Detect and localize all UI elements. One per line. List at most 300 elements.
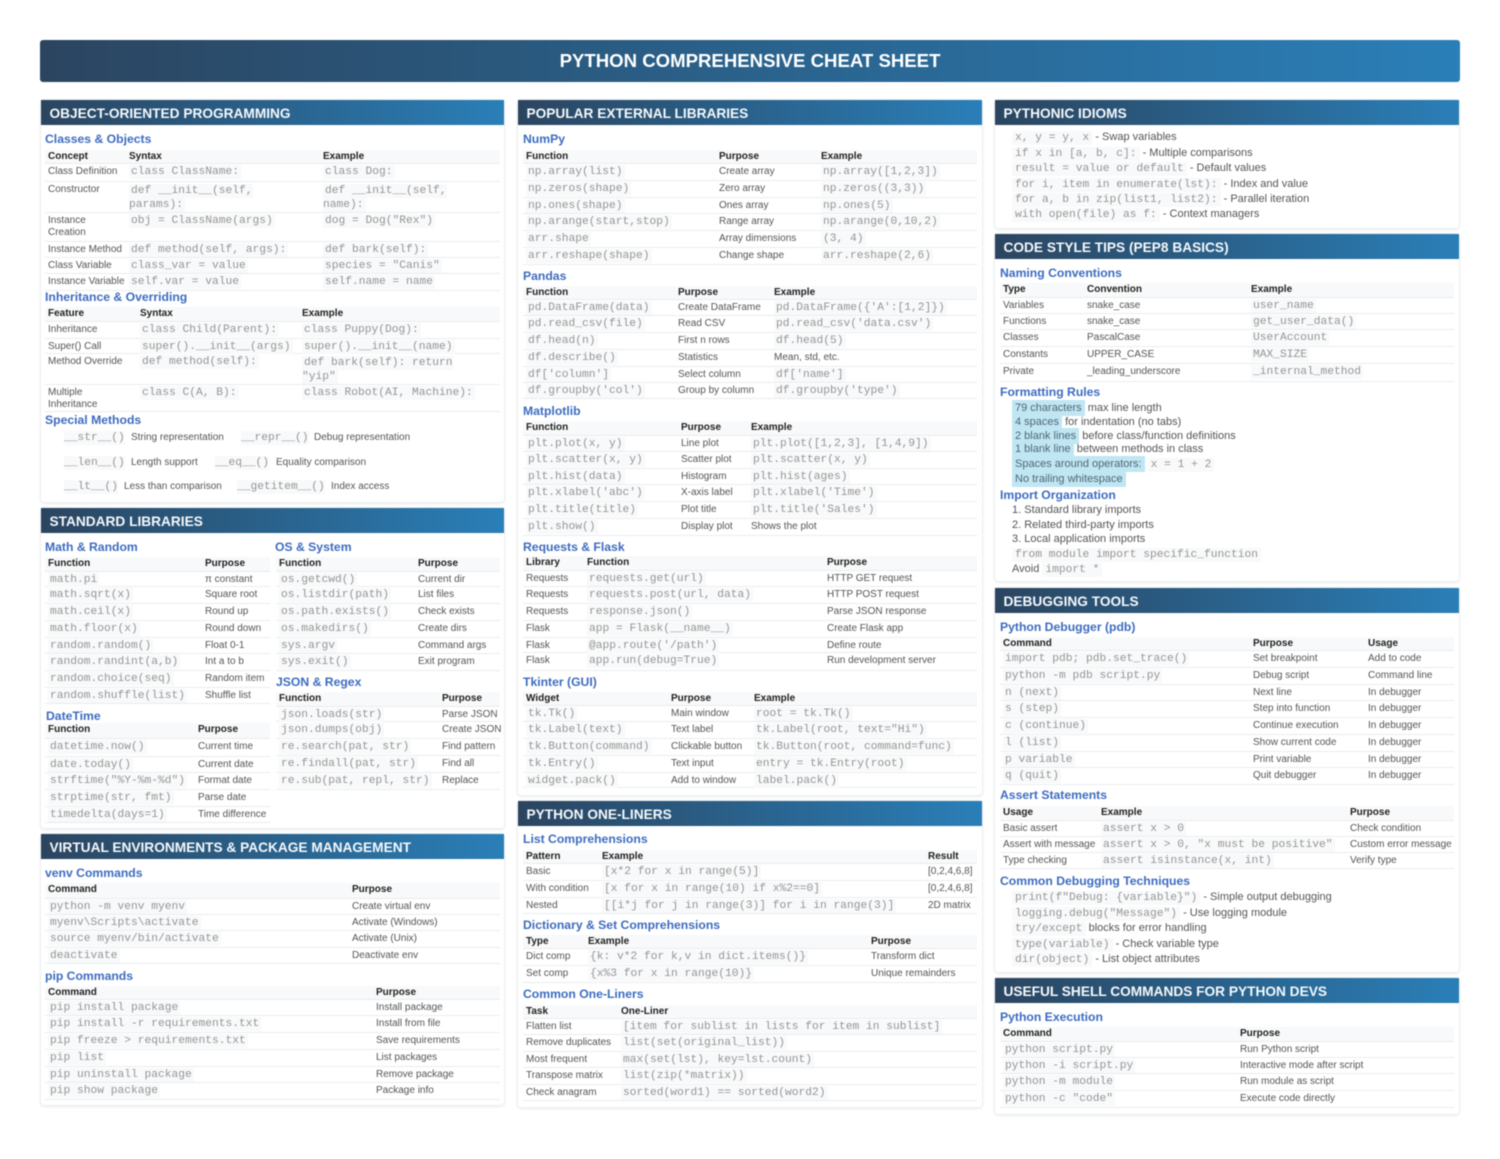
table: python execution: python -c "code" bbox=[1005, 1093, 1113, 1105]
subheading: math and random: Math & Random bbox=[45, 540, 138, 554]
heading: pythonic idioms: PYTHONIC IDIOMS bbox=[1004, 106, 1127, 121]
table: naming conventions: Convention bbox=[1087, 284, 1142, 295]
subheading: special methods: Special Methods bbox=[45, 413, 141, 427]
table: requests and flask: app = Flask(__name__) bbox=[589, 623, 731, 635]
subheading: venv commands: venv Commands bbox=[45, 866, 143, 880]
table: classes and objects: Syntax bbox=[129, 151, 162, 162]
table: pip commands bbox=[45, 986, 500, 1100]
table: classes and objects: def method(self, args): bbox=[131, 244, 286, 256]
table: inheritance and overriding: Syntax bbox=[140, 308, 173, 319]
subheading: import organization: Import Organization bbox=[1000, 488, 1116, 502]
subheading: numpy: NumPy bbox=[523, 132, 565, 146]
table: requests and flask: Library bbox=[526, 557, 560, 568]
table: inheritance and overriding: class Puppy(Dog): bbox=[304, 324, 419, 336]
table: datetime bbox=[45, 724, 270, 823]
table: json and regex: Create JSON bbox=[442, 724, 501, 735]
table: classes and objects: class Dog: bbox=[325, 166, 393, 178]
table: python execution: Command bbox=[1003, 1028, 1052, 1039]
table: math and random: π constant bbox=[205, 574, 252, 585]
table: classes and objects: Concept bbox=[48, 151, 88, 162]
table: list comprehensions: Basic bbox=[526, 866, 550, 877]
table: matplotlib: plt.plot(x, y) bbox=[528, 438, 623, 450]
table: os and system: Command args bbox=[418, 640, 486, 651]
table: pip commands: pip install package bbox=[50, 1002, 178, 1014]
list: special methods: __len__() bbox=[64, 457, 125, 469]
table: pandas: df['name'] bbox=[776, 369, 844, 381]
table: os and system: os.makedirs() bbox=[281, 623, 369, 635]
table: datetime: timedelta(days=1) bbox=[50, 809, 165, 821]
table: json and regex: Find all bbox=[442, 758, 474, 769]
table: python execution bbox=[1000, 1028, 1454, 1108]
list: formatting rules: 79 characters max line length bbox=[1015, 402, 1162, 414]
table: python debugger: Command line bbox=[1368, 670, 1432, 681]
table: pip commands: pip uninstall package bbox=[50, 1069, 192, 1081]
table: requests and flask: Requests bbox=[526, 589, 568, 600]
table: math and random: math.floor(x) bbox=[50, 623, 138, 635]
table: dictionary and set comprehensions: {x%3 for x in range(10)} bbox=[590, 968, 752, 980]
table: classes and objects: class_var = value bbox=[131, 260, 246, 272]
table: tkinter: tk.Button(root, command=func) bbox=[756, 741, 952, 753]
table: datetime: strftime("%Y-%m-%d") bbox=[50, 775, 185, 787]
table: python debugger: q (quit) bbox=[1005, 770, 1059, 782]
table: python debugger: import pdb; pdb.set_trace() bbox=[1005, 653, 1187, 665]
table: dictionary and set comprehensions: Type bbox=[526, 936, 549, 947]
table: classes and objects: def bark(self): bbox=[325, 244, 426, 256]
table: os and system bbox=[276, 558, 500, 671]
table: pip commands: Save requirements bbox=[376, 1035, 460, 1046]
table: os and system: Purpose bbox=[418, 558, 458, 569]
table: json and regex: Parse JSON bbox=[442, 709, 498, 720]
table: python debugger: Show current code bbox=[1253, 737, 1336, 748]
list: special methods: __eq__() bbox=[215, 457, 269, 469]
table: datetime: strptime(str, fmt) bbox=[50, 792, 172, 804]
table: classes and objects: Constructor bbox=[48, 184, 100, 195]
table: python debugger: Set breakpoint bbox=[1253, 653, 1318, 664]
table: pandas: Read CSV bbox=[678, 318, 725, 329]
table: python debugger: Quit debugger bbox=[1253, 770, 1316, 781]
table: requests and flask: Define route bbox=[827, 640, 881, 651]
table: math and random: Purpose bbox=[205, 558, 245, 569]
table: numpy: np.ones(shape) bbox=[528, 200, 623, 212]
table: json and regex: Find pattern bbox=[442, 741, 495, 752]
table: inheritance and overriding: Example bbox=[302, 308, 343, 319]
table: naming conventions: Variables bbox=[1003, 300, 1044, 311]
table: python debugger: Continue execution bbox=[1253, 720, 1339, 731]
table: pandas: Mean, std, etc. bbox=[774, 352, 840, 363]
table: pip commands: pip show package bbox=[50, 1085, 158, 1097]
table: python debugger: In debugger bbox=[1368, 754, 1421, 765]
table: requests and flask: requests.get(url) bbox=[589, 573, 704, 585]
table: pandas: Select column bbox=[678, 369, 741, 380]
list: special methods: Equality comparison bbox=[276, 457, 366, 468]
table: classes and objects: def __init__(self, bbox=[131, 185, 253, 197]
table: math and random: random.shuffle(list) bbox=[50, 690, 185, 702]
table: json and regex: re.sub(pat, repl, str) bbox=[281, 775, 430, 787]
table: tkinter: tk.Label(root, text="Hi") bbox=[756, 724, 925, 736]
table: common one-liners: Task bbox=[526, 1006, 548, 1017]
table: classes and objects: Class Definition bbox=[48, 166, 117, 177]
table: matplotlib: Display plot bbox=[681, 521, 733, 532]
table: common one-liners: Remove duplicates bbox=[526, 1037, 611, 1048]
table: tkinter: root = tk.Tk() bbox=[756, 708, 851, 720]
list: special methods: __repr__() bbox=[241, 432, 309, 444]
subheading: python execution: Python Execution bbox=[1000, 1010, 1103, 1024]
table: python execution: python -m module bbox=[1005, 1076, 1113, 1088]
table: assert statements: Example bbox=[1101, 807, 1142, 818]
table: requests and flask: Run development server bbox=[827, 655, 936, 666]
table: math and random: Square root bbox=[205, 589, 257, 600]
table: numpy: np.zeros(shape) bbox=[528, 183, 629, 195]
subheading: python debugger: Python Debugger (pdb) bbox=[1000, 620, 1135, 634]
table: tkinter: Clickable button bbox=[671, 741, 742, 752]
table: requests and flask bbox=[523, 556, 977, 671]
table: pip commands: pip freeze > requirements.txt bbox=[50, 1035, 246, 1047]
table: python debugger: Debug script bbox=[1253, 670, 1309, 681]
table: list comprehensions: 2D matrix bbox=[928, 900, 971, 911]
table: matplotlib: Example bbox=[751, 422, 792, 433]
table: inheritance and overriding: super().__init__(args) bbox=[142, 341, 291, 353]
list: pythonic idioms: with open(file) as f: - Context managers bbox=[1015, 208, 1259, 221]
table: classes and objects: Example bbox=[323, 151, 364, 162]
table: list comprehensions: Example bbox=[602, 851, 643, 862]
table: classes and objects: def __init__(self, bbox=[325, 185, 447, 197]
title bbox=[40, 40, 1460, 82]
table: inheritance and overriding: Multiple bbox=[48, 387, 82, 398]
table: matplotlib: plt.xlabel('abc') bbox=[528, 487, 643, 499]
table: matplotlib: Line plot bbox=[681, 438, 719, 449]
heading: virtual environments: VIRTUAL ENVIRONMENTS & PACKAGE MANAGEMENT bbox=[50, 840, 411, 855]
table: inheritance and overriding bbox=[45, 308, 500, 412]
table: naming conventions: Private bbox=[1003, 366, 1034, 377]
table: matplotlib: Shows the plot bbox=[751, 521, 817, 532]
table: requests and flask: HTTP POST request bbox=[827, 589, 919, 600]
table: datetime: Function bbox=[48, 724, 90, 735]
table: matplotlib: Function bbox=[526, 422, 568, 433]
list: special methods: __lt__() bbox=[64, 481, 118, 493]
list: special methods: Length support bbox=[131, 457, 198, 468]
table: math and random: random.random() bbox=[50, 640, 151, 652]
table: classes and objects: dog = Dog("Rex") bbox=[325, 215, 433, 227]
table: list comprehensions: [0,2,4,6,8] bbox=[928, 883, 972, 894]
table: classes and objects: class ClassName: bbox=[131, 166, 239, 178]
table: python debugger: In debugger bbox=[1368, 770, 1421, 781]
table: os and system: sys.exit() bbox=[281, 656, 349, 668]
subheading: naming conventions: Naming Conventions bbox=[1000, 266, 1122, 280]
table: os and system: sys.argv bbox=[281, 640, 335, 652]
table: pandas: df.groupby('type') bbox=[776, 385, 898, 397]
table: matplotlib: plt.show() bbox=[528, 521, 596, 533]
subheading: list comprehensions: List Comprehensions bbox=[523, 832, 648, 846]
table: naming conventions: Constants bbox=[1003, 349, 1048, 360]
table: numpy: Array dimensions bbox=[719, 233, 796, 244]
subheading: inheritance and overriding: Inheritance & Overriding bbox=[45, 290, 187, 304]
table: venv commands: myenv\Scripts\activate bbox=[50, 917, 199, 929]
table: list comprehensions: Nested bbox=[526, 900, 558, 911]
table: pandas: pd.DataFrame({'A':[1,2]}) bbox=[776, 302, 945, 314]
table: dictionary and set comprehensions: Example bbox=[588, 936, 629, 947]
table: os and system: os.getcwd() bbox=[281, 574, 355, 586]
table: matplotlib: plt.scatter(x, y) bbox=[528, 454, 643, 466]
table: pip commands: Install from file bbox=[376, 1018, 440, 1029]
table: math and random bbox=[45, 558, 270, 704]
table: matplotlib: plt.plot([1,2,3], [1,4,9]) bbox=[753, 438, 929, 450]
table: inheritance and overriding: "yip" bbox=[302, 371, 336, 383]
table: tkinter: Text label bbox=[671, 724, 713, 735]
table: naming conventions: PascalCase bbox=[1087, 332, 1140, 343]
panel: pythonic idioms bbox=[995, 100, 1459, 228]
table: naming conventions: Functions bbox=[1003, 316, 1046, 327]
table: python execution: python script.py bbox=[1005, 1044, 1113, 1056]
list: common debugging techniques: logging.debug("Message") - Use logging module bbox=[1015, 907, 1287, 920]
table: tkinter: Text input bbox=[671, 758, 714, 769]
heading: object-oriented programming bbox=[41, 100, 504, 125]
table: matplotlib: Histogram bbox=[681, 471, 727, 482]
table: inheritance and overriding: Inheritance bbox=[48, 399, 97, 410]
table: venv commands: Create virtual env bbox=[352, 901, 430, 912]
table: math and random: Random item bbox=[205, 673, 264, 684]
table: requests and flask: HTTP GET request bbox=[827, 573, 912, 584]
table: assert statements bbox=[1000, 806, 1454, 869]
table: common one-liners: [item for sublist in lists for item in sublist] bbox=[623, 1021, 940, 1033]
table: datetime: Purpose bbox=[198, 724, 238, 735]
table: venv commands: Activate (Unix) bbox=[352, 933, 417, 944]
table: numpy bbox=[523, 150, 977, 265]
table: assert statements: Check condition bbox=[1350, 823, 1421, 834]
table: json and regex: re.findall(pat, str) bbox=[281, 758, 416, 770]
table: pip commands: pip list bbox=[50, 1052, 104, 1064]
panel: python one-liners bbox=[518, 801, 982, 1107]
table: naming conventions: _internal_method bbox=[1253, 366, 1361, 378]
table: python debugger: Print variable bbox=[1253, 754, 1311, 765]
table: numpy: Zero array bbox=[719, 183, 765, 194]
subheading: os and system: OS & System bbox=[275, 540, 352, 554]
table: python debugger bbox=[1000, 638, 1454, 785]
subheading: requests and flask: Requests & Flask bbox=[523, 540, 625, 554]
table: list comprehensions: [[i*j for j in range(3)] for i in range(3)] bbox=[604, 900, 894, 912]
table: pandas: df.groupby('col') bbox=[528, 385, 643, 397]
table: venv commands: Purpose bbox=[352, 884, 392, 895]
table: common one-liners: sorted(word1) == sorted(word2) bbox=[623, 1087, 826, 1099]
table: common one-liners bbox=[523, 1006, 977, 1101]
table: numpy: Create array bbox=[719, 166, 775, 177]
table: tkinter: Add to window bbox=[671, 775, 736, 786]
table: pandas bbox=[523, 286, 977, 399]
table: math and random: Int a to b bbox=[205, 656, 244, 667]
table: numpy: Change shape bbox=[719, 250, 784, 261]
table: math and random: math.pi bbox=[50, 574, 97, 586]
table: requests and flask: Function bbox=[587, 557, 629, 568]
table: numpy: np.arange(0,10,2) bbox=[823, 216, 938, 228]
table: numpy: Ones array bbox=[719, 200, 768, 211]
list: common debugging techniques: type(variable) - Check variable type bbox=[1015, 938, 1219, 951]
list: pythonic idioms: x, y = y, x - Swap variables bbox=[1015, 131, 1177, 144]
heading: python one-liners bbox=[518, 801, 982, 826]
table: inheritance and overriding: Super() Call bbox=[48, 341, 101, 352]
heading: code style tips bbox=[995, 234, 1459, 259]
table: tkinter: tk.Tk() bbox=[528, 708, 575, 720]
list: special methods bbox=[64, 431, 410, 493]
subheading: common debugging techniques: Common Debugging Techniques bbox=[1000, 874, 1190, 888]
table: numpy: np.ones(5) bbox=[823, 200, 891, 212]
table: pip commands: Purpose bbox=[376, 987, 416, 998]
table: tkinter: Main window bbox=[671, 708, 729, 719]
table: python debugger: Step into function bbox=[1253, 703, 1330, 714]
table: venv commands: Command bbox=[48, 884, 97, 895]
title: PYTHON COMPREHENSIVE CHEAT SHEET bbox=[560, 50, 940, 71]
list: pythonic idioms: result = value or default - Default values bbox=[1015, 162, 1266, 175]
table: requests and flask: Parse JSON response bbox=[827, 606, 926, 617]
list: pythonic idioms bbox=[1014, 131, 1310, 221]
table: list comprehensions: [0,2,4,6,8] bbox=[928, 866, 972, 877]
subheading: assert statements: Assert Statements bbox=[1000, 788, 1107, 802]
table: python debugger: python -m pdb script.py bbox=[1005, 670, 1160, 682]
list: pythonic idioms: for a, b in zip(list1, list2): - Parallel iteration bbox=[1015, 193, 1309, 206]
table: tkinter: label.pack() bbox=[756, 775, 837, 787]
table: tkinter: Purpose bbox=[671, 693, 711, 704]
table: classes and objects: Class Variable bbox=[48, 260, 112, 271]
list: special methods: __str__() bbox=[64, 432, 125, 444]
table: python debugger: Command bbox=[1003, 638, 1052, 649]
table: requests and flask: response.json() bbox=[589, 606, 690, 618]
table: python execution: python -i script.py bbox=[1005, 1060, 1133, 1072]
table: common one-liners: max(set(lst), key=lst.count) bbox=[623, 1054, 812, 1066]
table: numpy: Example bbox=[821, 151, 862, 162]
list: special methods: Less than comparison bbox=[124, 481, 222, 492]
table: inheritance and overriding: super().__init__(name) bbox=[304, 341, 453, 353]
table: pandas: Function bbox=[526, 287, 568, 298]
table: python debugger: In debugger bbox=[1368, 720, 1421, 731]
table: json and regex: Replace bbox=[442, 775, 479, 786]
table: numpy: np.array([1,2,3]) bbox=[823, 166, 938, 178]
table: common one-liners: One-Liner bbox=[621, 1006, 668, 1017]
table: numpy: np.array(list) bbox=[528, 166, 623, 178]
heading: standard libraries: STANDARD LIBRARIES bbox=[50, 514, 203, 529]
list: formatting rules: Spaces around operators: x = 1 + 2 bbox=[1015, 458, 1211, 471]
heading: python one-liners: PYTHON ONE-LINERS bbox=[526, 807, 672, 822]
heading: useful shell commands: USEFUL SHELL COMMANDS FOR PYTHON DEVS bbox=[1004, 984, 1327, 999]
table: common one-liners: Flatten list bbox=[526, 1021, 572, 1032]
table: pip commands: Install package bbox=[376, 1002, 443, 1013]
list: formatting rules: No trailing whitespace bbox=[1015, 473, 1123, 485]
table: naming conventions bbox=[1000, 284, 1454, 382]
table: os and system: Current dir bbox=[418, 574, 465, 585]
table: python execution: Interactive mode after script bbox=[1240, 1060, 1363, 1071]
table: matplotlib: plt.title('Sales') bbox=[753, 504, 875, 516]
list: import organization: 2. Related third-party imports bbox=[1012, 519, 1154, 531]
heading: object-oriented programming: OBJECT-ORIENTED PROGRAMMING bbox=[50, 106, 291, 121]
table: pip commands: Remove package bbox=[376, 1069, 454, 1080]
subheading: datetime: DateTime bbox=[46, 709, 101, 723]
table: math and random: math.ceil(x) bbox=[50, 606, 131, 618]
table: datetime: date.today() bbox=[50, 759, 131, 771]
table: dictionary and set comprehensions bbox=[523, 936, 977, 983]
list: special methods: String representation bbox=[131, 432, 224, 443]
table: pip commands: pip install -r requirements.txt bbox=[50, 1018, 259, 1030]
table: pip commands: Package info bbox=[376, 1085, 434, 1096]
heading: pythonic idioms bbox=[995, 100, 1459, 125]
subheading: classes and objects: Classes & Objects bbox=[45, 132, 151, 146]
table: dictionary and set comprehensions: {k: v*2 for k,v in dict.items()} bbox=[590, 951, 806, 963]
table: requests and flask: app.run(debug=True) bbox=[589, 655, 717, 667]
table: numpy: arr.shape bbox=[528, 233, 589, 245]
table: assert statements: assert x > 0 bbox=[1103, 823, 1184, 835]
panel: useful shell commands bbox=[995, 978, 1459, 1114]
table: requests and flask: Flask bbox=[526, 655, 550, 666]
table: datetime: Current time bbox=[198, 741, 253, 752]
table: python debugger: l (list) bbox=[1005, 737, 1059, 749]
list: import organization bbox=[1012, 504, 1258, 576]
list: formatting rules: 4 spaces for indentation (no tabs) bbox=[1015, 416, 1181, 428]
list: common debugging techniques: print(f"Debug: {variable}") - Simple output debugging bbox=[1015, 891, 1332, 904]
table: venv commands: python -m venv myenv bbox=[50, 901, 185, 913]
subheading: common one-liners: Common One-Liners bbox=[523, 987, 644, 1001]
table: json and regex bbox=[276, 692, 502, 790]
table: python debugger: In debugger bbox=[1368, 737, 1421, 748]
subheading: pip commands: pip Commands bbox=[45, 969, 133, 983]
table: pandas: Example bbox=[774, 287, 815, 298]
heading: popular external libraries bbox=[518, 100, 982, 125]
table: pandas: First n rows bbox=[678, 335, 730, 346]
table: matplotlib: Plot title bbox=[681, 504, 717, 515]
panel: virtual environments and package management bbox=[41, 834, 504, 1105]
table: matplotlib: Purpose bbox=[681, 422, 721, 433]
table: dictionary and set comprehensions: Set comp bbox=[526, 968, 568, 979]
table: matplotlib: plt.title(title) bbox=[528, 504, 636, 516]
table: classes and objects: params): bbox=[129, 199, 183, 211]
list: special methods: __getitem__() bbox=[237, 481, 325, 493]
table: pandas: df.describe() bbox=[528, 352, 616, 364]
table: requests and flask: requests.post(url, data) bbox=[589, 589, 751, 601]
table: numpy: np.zeros((3,3)) bbox=[823, 183, 924, 195]
table: os and system: List files bbox=[418, 589, 454, 600]
table: classes and objects: obj = ClassName(args) bbox=[131, 215, 273, 227]
heading: debugging tools bbox=[995, 588, 1459, 613]
table: dictionary and set comprehensions: Dict comp bbox=[526, 951, 570, 962]
table: python execution: Purpose bbox=[1240, 1028, 1280, 1039]
table: naming conventions: user_name bbox=[1253, 300, 1314, 312]
table: python execution: Execute code directly bbox=[1240, 1093, 1335, 1104]
table: json and regex: Purpose bbox=[442, 693, 482, 704]
table: os and system: Create dirs bbox=[418, 623, 467, 634]
table: os and system: Function bbox=[279, 558, 321, 569]
heading: standard libraries bbox=[41, 508, 504, 533]
table: json and regex: json.loads(str) bbox=[281, 709, 382, 721]
panel: object-oriented programming bbox=[41, 100, 504, 502]
table: naming conventions: get_user_data() bbox=[1253, 316, 1354, 328]
table: pandas: df.head(n) bbox=[528, 335, 596, 347]
table: json and regex: Function bbox=[279, 693, 321, 704]
panel: debugging tools bbox=[995, 588, 1459, 972]
table: dictionary and set comprehensions: Purpose bbox=[871, 936, 911, 947]
table: numpy: arr.reshape(2,6) bbox=[823, 250, 931, 262]
table: assert statements: Type checking bbox=[1003, 855, 1067, 866]
table: requests and flask: Flask bbox=[526, 623, 550, 634]
table: inheritance and overriding: Inheritance bbox=[48, 324, 97, 335]
table: python debugger: s (step) bbox=[1005, 703, 1059, 715]
table: python execution: Run Python script bbox=[1240, 1044, 1319, 1055]
table: tkinter: tk.Entry() bbox=[528, 758, 596, 770]
table: classes and objects: species = "Canis" bbox=[325, 260, 440, 272]
table: tkinter: widget.pack() bbox=[528, 775, 616, 787]
table: common one-liners: Most frequent bbox=[526, 1054, 587, 1065]
table: naming conventions: Example bbox=[1251, 284, 1292, 295]
table: math and random: math.sqrt(x) bbox=[50, 589, 131, 601]
table: math and random: random.choice(seq) bbox=[50, 673, 172, 685]
table: common one-liners: Transpose matrix bbox=[526, 1070, 603, 1081]
table: naming conventions: UPPER_CASE bbox=[1087, 349, 1154, 360]
table: python debugger: c (continue) bbox=[1005, 720, 1086, 732]
table: pandas: Purpose bbox=[678, 287, 718, 298]
